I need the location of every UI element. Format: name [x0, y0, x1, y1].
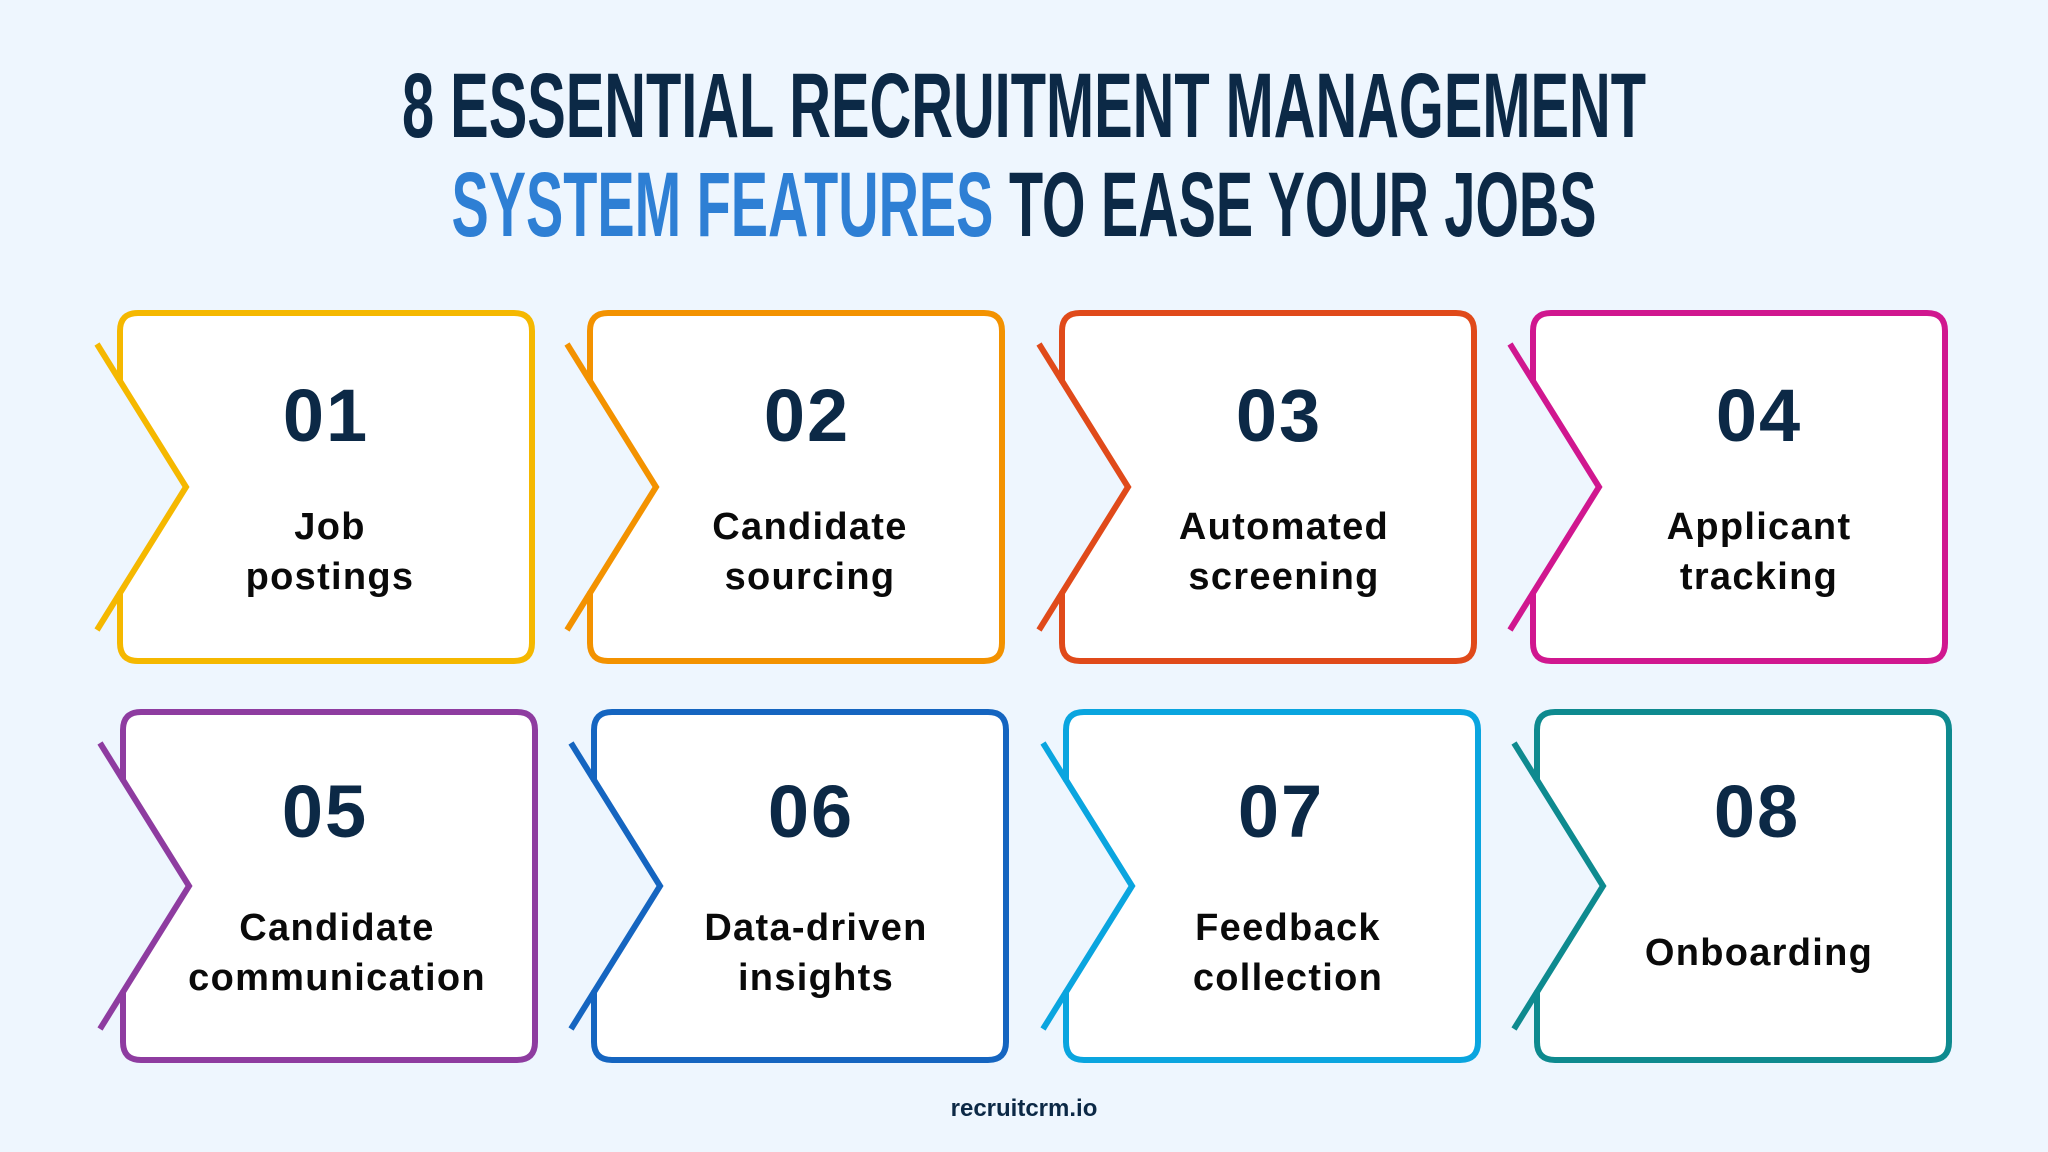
card 02: sourcing — [725, 556, 895, 598]
card 04: Applicant — [1667, 506, 1851, 548]
card 07 — [1043, 712, 1478, 1060]
card 02: Candidate — [712, 506, 908, 548]
card 05: communication — [188, 957, 486, 999]
card 06: insights — [738, 957, 894, 999]
card 03: screening — [1188, 556, 1380, 598]
card 04: tracking — [1680, 556, 1838, 598]
card 07: collection — [1193, 957, 1383, 999]
card 01: 01 — [283, 374, 369, 457]
title: SYSTEM FEATURES TO EASE YOUR JOBS — [452, 154, 1596, 256]
card 06: 06 — [768, 770, 854, 853]
card 08: 08 — [1714, 770, 1800, 853]
card 03: Automated — [1179, 506, 1389, 548]
card 07: 07 — [1238, 770, 1324, 853]
card 05: 05 — [282, 770, 368, 853]
card 03 — [1039, 313, 1474, 661]
card 04 — [1510, 313, 1945, 661]
card 06 — [571, 712, 1006, 1060]
card 01: postings — [246, 556, 414, 598]
card 06: Data-driven — [704, 907, 928, 949]
card 02: 02 — [764, 374, 850, 457]
card 04: 04 — [1716, 374, 1802, 457]
card 08 — [1514, 712, 1949, 1060]
card 08: Onboarding — [1645, 932, 1873, 974]
card 01: Job — [294, 506, 366, 548]
card 07: Feedback — [1195, 907, 1381, 949]
footer: recruitcrm.io — [951, 1095, 1097, 1122]
card 05: Candidate — [239, 907, 435, 949]
card 03: 03 — [1236, 374, 1322, 457]
card 01 — [97, 313, 532, 661]
title — [402, 55, 1646, 256]
card 02 — [567, 313, 1002, 661]
card 05 — [100, 712, 535, 1060]
